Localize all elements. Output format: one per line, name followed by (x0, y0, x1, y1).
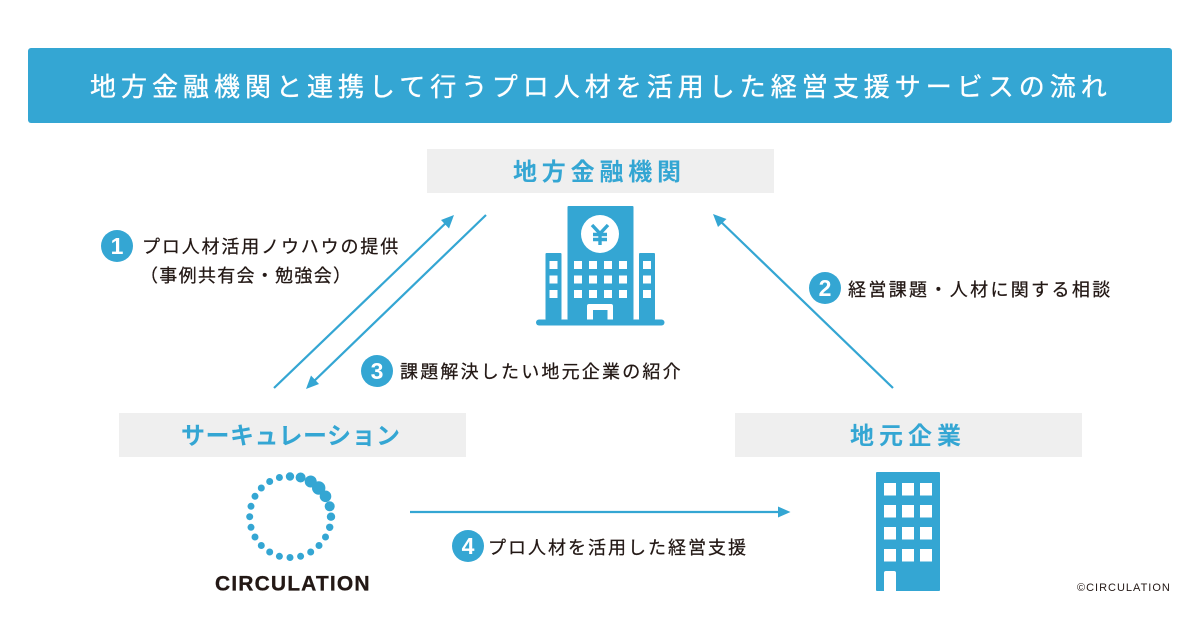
node heading: local company: 地元企業 (850, 422, 966, 450)
logo: Circulation dotted ring (246, 472, 335, 561)
node heading: Circulation: サーキュレーション (181, 422, 401, 450)
node heading: local company (735, 412, 1082, 457)
step badge 4: 4 (462, 533, 475, 559)
node heading: Circulation (119, 412, 466, 457)
step 4 text: プロ人材を活用した経営支援 (488, 538, 748, 558)
step 3 text: 課題解決したい地元企業の紹介 (400, 362, 683, 382)
arrow 2: local company to financial institution (713, 214, 893, 388)
icon: local company building (876, 472, 940, 591)
arrow 1: Circulation to financial institution (274, 215, 454, 388)
step badge 1 (101, 230, 133, 262)
step badge 4 (452, 530, 484, 562)
step badge 2: 2 (819, 275, 831, 301)
copyright: ©CIRCULATION (1077, 582, 1171, 594)
step 1 text (140, 237, 400, 286)
logo: CIRCULATION wordmark: CIRCULATION (215, 572, 370, 596)
node heading: regional financial institution: 地方金融機関 (513, 159, 686, 186)
title banner (28, 48, 1172, 123)
step badge 3 (361, 355, 393, 387)
icon: bank building (536, 206, 664, 326)
arrow 3: financial institution to Circulation (306, 215, 486, 389)
step badge 2 (809, 272, 841, 304)
step 1 text: （事例共有会・勉強会） (140, 266, 352, 286)
node heading: regional financial institution (427, 149, 774, 192)
title text: 地方金融機関と連携して行うプロ人材を活用した経営支援サービスの流れ (90, 72, 1112, 102)
step badge 1: 1 (111, 233, 124, 259)
arrow 4: Circulation to local company (410, 506, 790, 518)
step badge 3: 3 (371, 358, 383, 384)
step 1 text: プロ人材活用ノウハウの提供 (142, 237, 400, 257)
step 2 text: 経営課題・人材に関する相談 (848, 280, 1113, 300)
